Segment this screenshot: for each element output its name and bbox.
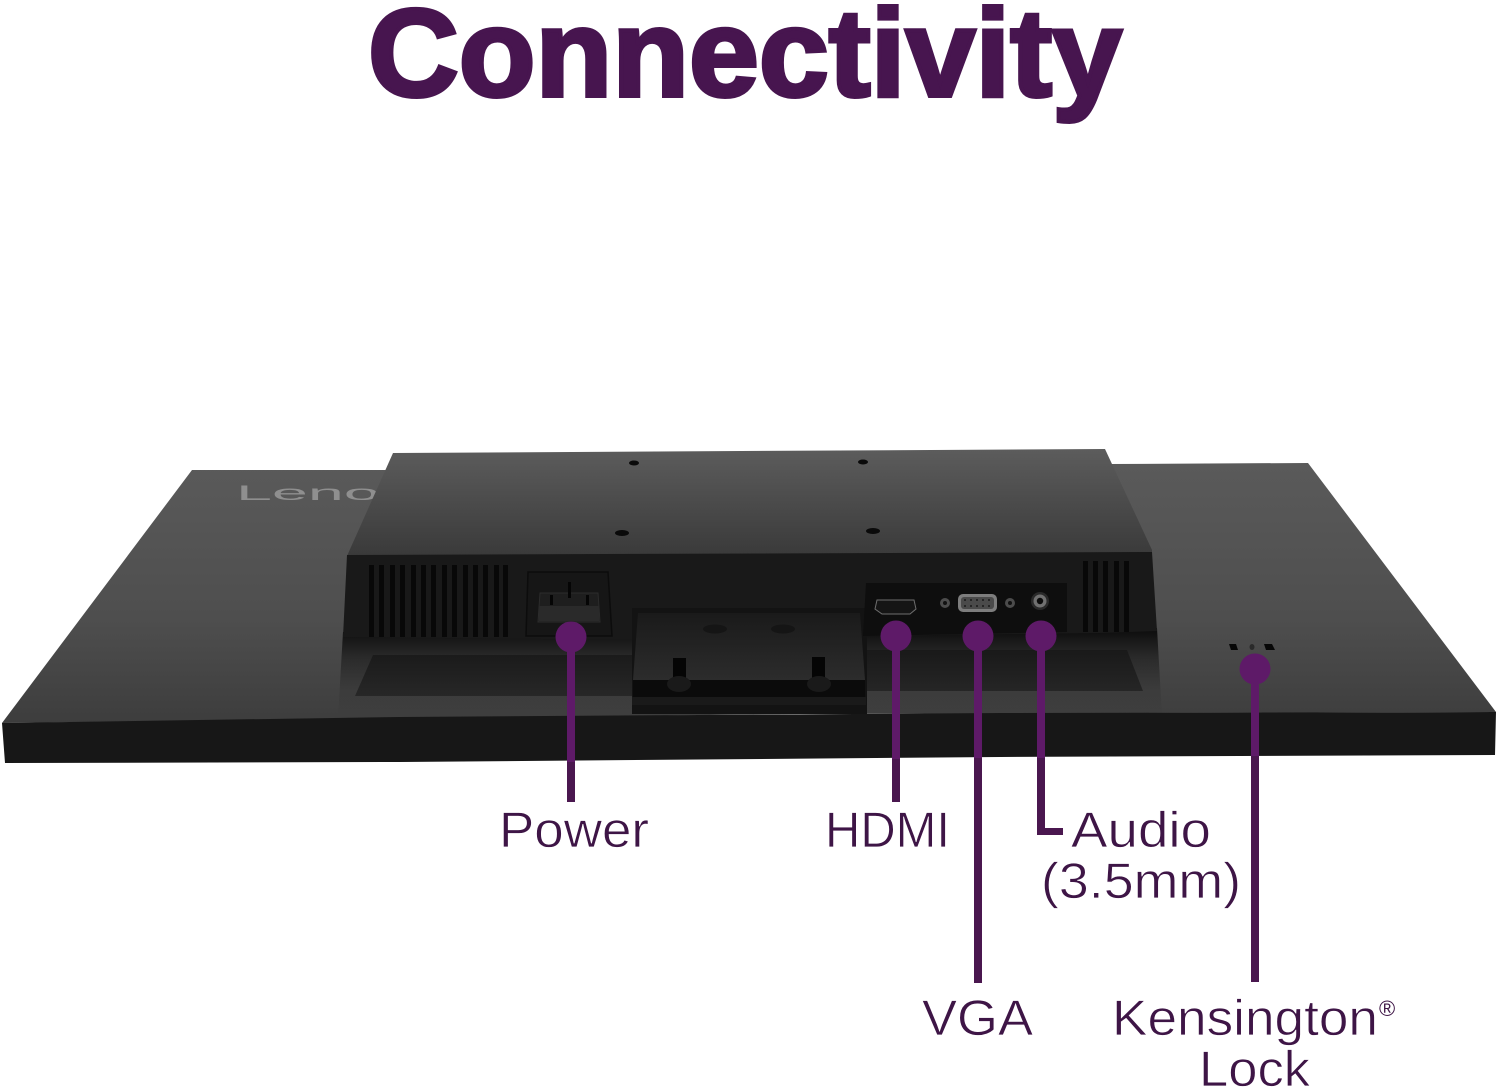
right vents — [1083, 561, 1129, 632]
callout: VGA: VGA — [922, 990, 1034, 1046]
callout: Audio — [1026, 620, 1241, 909]
left vents — [369, 565, 508, 637]
callout: Audio: (3.5mm) — [1041, 853, 1241, 909]
callout: Kensington Lock — [1112, 654, 1395, 1090]
Lenovo logo: Lenovo — [236, 482, 448, 505]
callout: HDMI — [825, 620, 950, 858]
callout: Power — [499, 622, 649, 858]
stand hinge plate — [632, 608, 867, 714]
callout: VGA — [922, 620, 1034, 1046]
callout: Kensington Lock: Kensington — [1112, 990, 1378, 1046]
port panel — [863, 583, 1067, 636]
callout: HDMI: HDMI — [825, 802, 950, 858]
left recess — [355, 655, 640, 696]
callout: Power: Power — [499, 802, 649, 858]
stand mount top — [347, 449, 1152, 556]
monitor back surface — [2, 463, 1496, 723]
audio jack — [1031, 592, 1049, 610]
mount screw holes — [615, 460, 880, 536]
shadow under stand — [338, 628, 1162, 718]
right recess — [860, 650, 1143, 691]
power socket — [526, 572, 612, 636]
callout: Kensington Lock: ® — [1379, 996, 1395, 1021]
VGA port — [940, 594, 1015, 612]
Kensington lock slots — [1229, 644, 1275, 650]
stand mount front face — [343, 552, 1157, 640]
monitor rear view — [2, 449, 1496, 763]
monitor front edge — [2, 712, 1496, 763]
callout: Audio: Audio — [1071, 802, 1211, 858]
HDMI port — [875, 600, 916, 614]
